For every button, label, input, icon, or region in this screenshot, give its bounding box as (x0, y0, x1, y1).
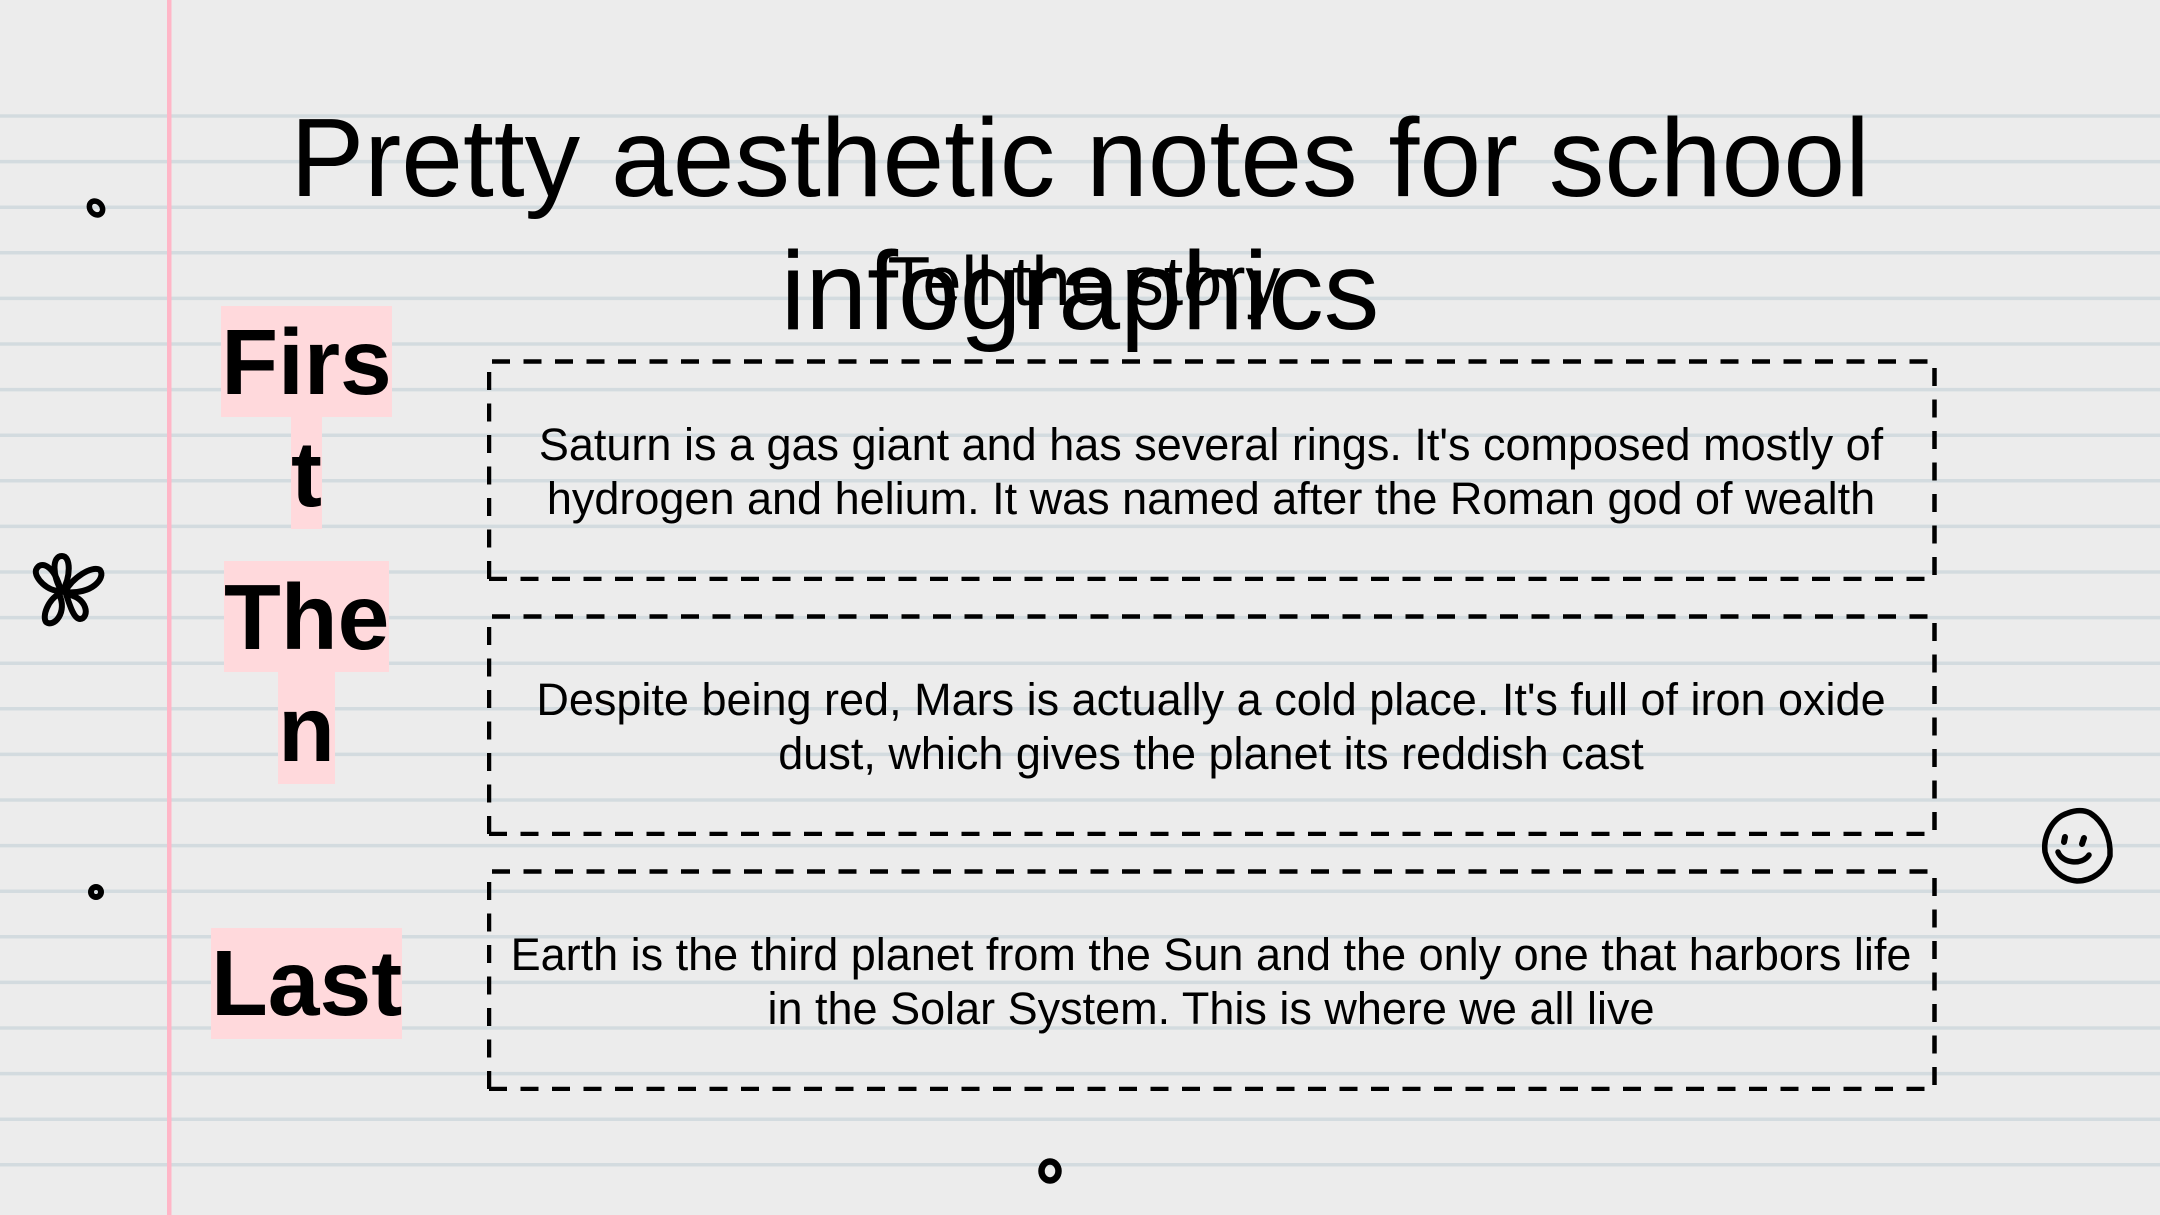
icon: small ring top left (86, 198, 106, 218)
icon: smiley doodle (2042, 808, 2113, 884)
label: First: Firs (221, 310, 392, 414)
title: infographics (781, 229, 1379, 353)
panel: Earth text box: in the Solar System. This is where we all live (767, 983, 1654, 1034)
panel: Earth text box (487, 869, 1937, 1091)
label: First: t (291, 422, 322, 526)
subtitle: Tell the story: Tell the story (888, 242, 1280, 320)
panel: Saturn text box: Saturn is a gas giant and has several rings. It's composed mostly of (539, 419, 1883, 470)
icon: small dot left (88, 884, 104, 900)
panel: Saturn text box (487, 359, 1937, 581)
label: Then: n (278, 677, 335, 781)
panel: Saturn text box: hydrogen and helium. It was named after the Roman god of wealth (547, 473, 1875, 524)
label: Then (224, 561, 389, 784)
label: Then: The (224, 565, 389, 669)
panel: Mars text box (487, 614, 1937, 836)
title: Pretty aesthetic notes for school (290, 96, 1870, 220)
title (290, 96, 1870, 353)
label: First (221, 306, 392, 529)
panel: Earth text box: Earth is the third planet from the Sun and the only one that harbors life (511, 929, 1911, 980)
label: Last: Last (211, 931, 402, 1035)
panel: Mars text box: dust, which gives the planet its reddish cast (778, 728, 1644, 779)
panel: Mars text box: Despite being red, Mars is actually a cold place. It's full of iron oxide (536, 674, 1886, 725)
icon: small ring bottom (1038, 1158, 1062, 1184)
icon: flower doodle (32, 553, 104, 626)
